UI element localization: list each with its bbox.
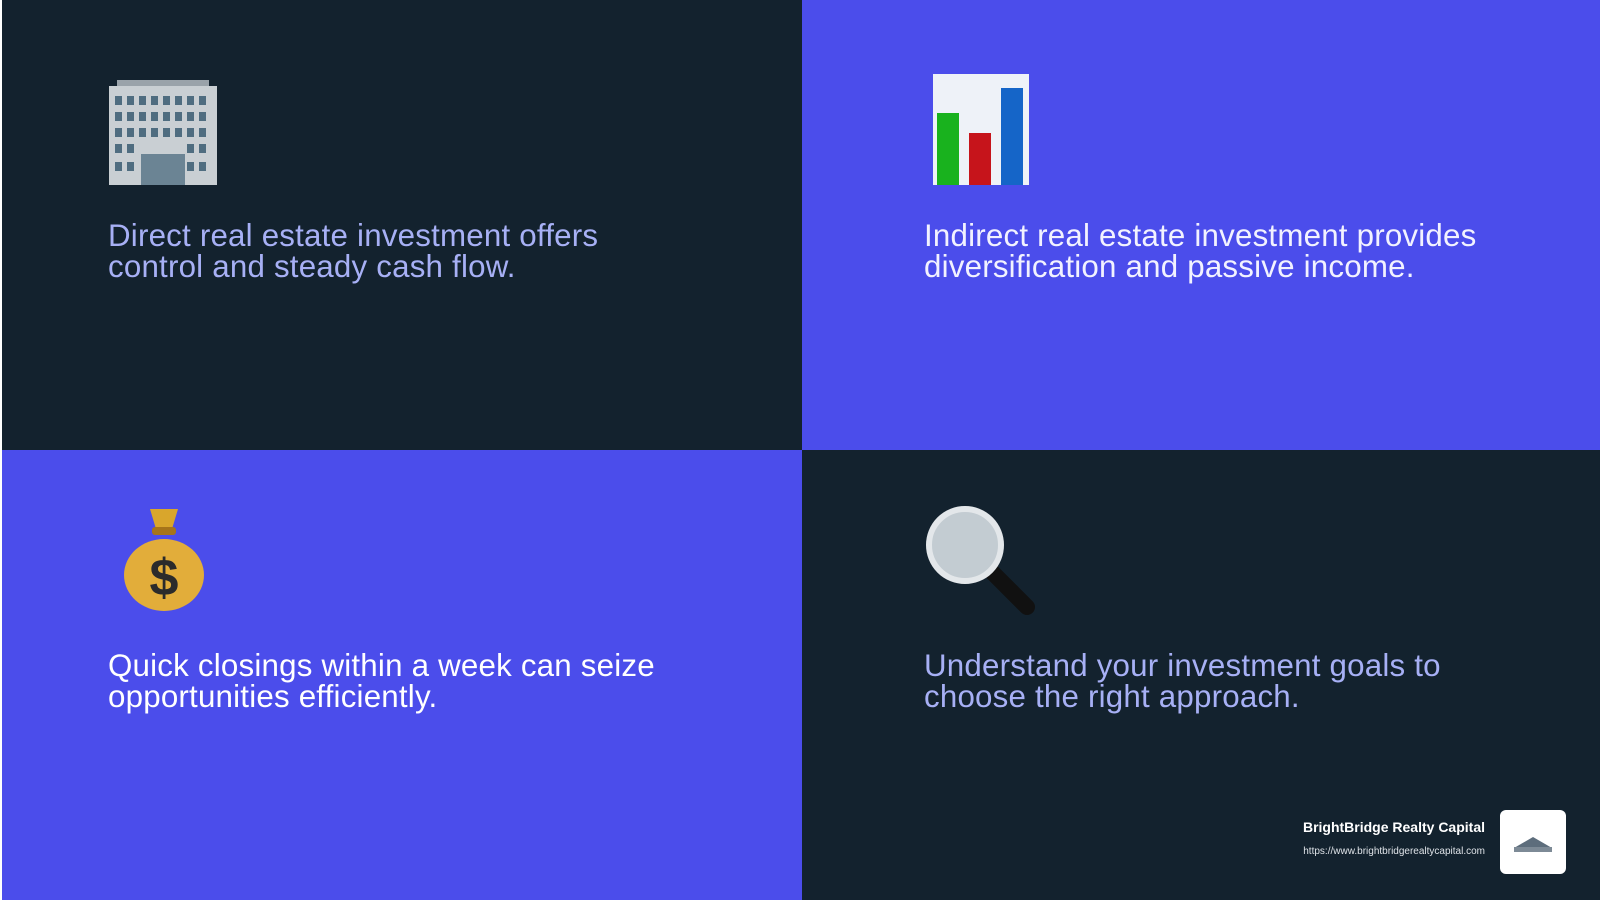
text: indirect [924,218,1476,284]
panel: quick closings [2,450,802,900]
icon: money bag [124,509,204,611]
text: direct: Direct real estate investment offers [108,218,598,253]
text: indirect: Indirect real estate investment provides [924,218,1476,253]
text: goals: Understand your investment goals to [924,648,1441,683]
icon: money bag: $ [150,549,179,607]
branding [1303,810,1566,874]
panel: goals [802,450,1600,900]
text: indirect: diversification and passive income. [924,249,1415,284]
icon: office building [109,80,217,185]
panel: direct investment [2,0,802,450]
text: goals: choose the right approach. [924,679,1300,714]
text: quick closings [108,648,655,714]
panel: indirect investment [802,0,1600,450]
text: direct [108,218,598,284]
icon: bar chart [933,74,1029,185]
company name: BrightBridge Realty Capital [1303,819,1485,835]
text: quick closings: opportunities efficiently. [108,679,437,714]
text: quick closings: Quick closings within a week can seize [108,648,655,683]
text: goals [924,648,1441,714]
url: https://www.brightbridgerealtycapital.com [1303,846,1485,857]
icon: magnifier [926,506,1035,615]
logo [1500,810,1566,874]
text: direct: control and steady cash flow. [108,249,516,284]
